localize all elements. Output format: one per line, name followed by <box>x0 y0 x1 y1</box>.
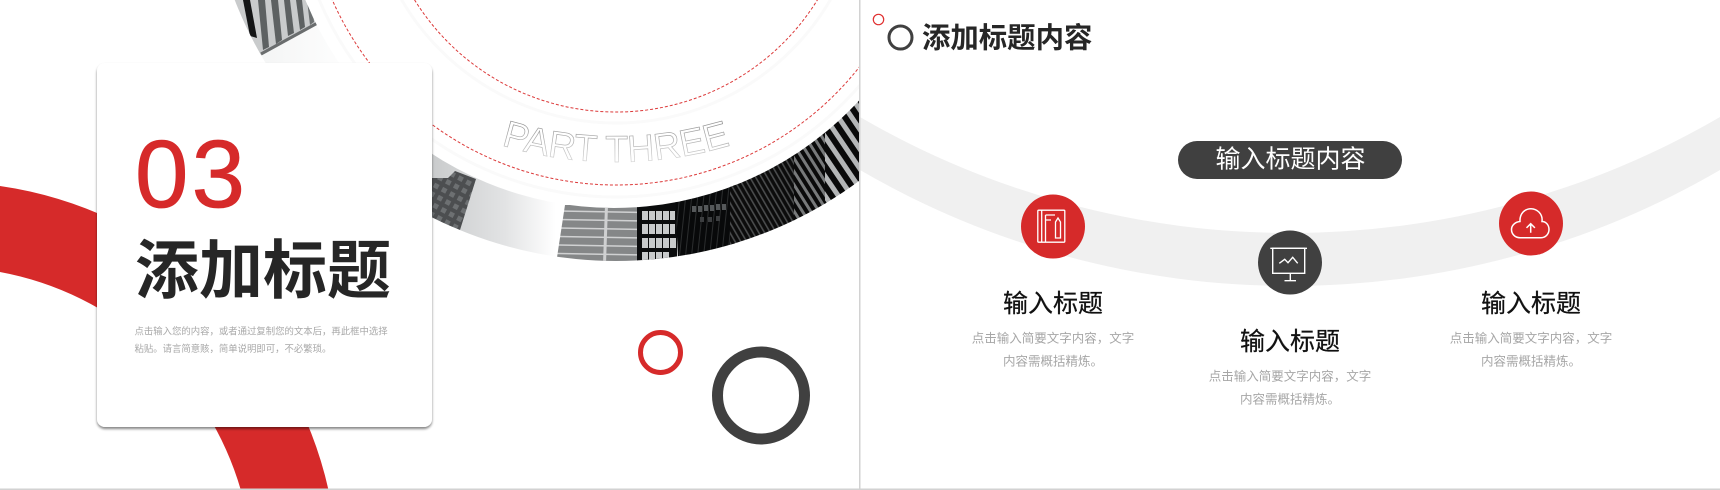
building at top <box>234 0 317 56</box>
panel: right content slide <box>860 14 1720 407</box>
sky at lower left <box>432 154 542 254</box>
icon: presentation screen <box>1258 230 1322 294</box>
photo ring: city buildings <box>225 0 860 270</box>
section description <box>134 326 388 354</box>
black tower with lit windows <box>637 202 677 260</box>
item 3 text: 点击输入简要文字内容，文字 <box>1450 330 1612 346</box>
section number: 03 <box>135 121 245 228</box>
item 1 text <box>972 330 1134 368</box>
item 1 text: 点击输入简要文字内容，文字 <box>972 330 1134 346</box>
soft ring glow outer <box>294 0 938 197</box>
item 1 text: 内容需概括精炼。 <box>1003 354 1103 368</box>
card <box>97 63 432 427</box>
dark glass tower <box>676 185 735 256</box>
dashed circle inner <box>414 0 818 112</box>
section description: 粘贴。请言简意赅，简单说明即可，不必繁琐。 <box>134 343 331 354</box>
grey curved band <box>860 117 1720 286</box>
grey building at lower left <box>428 171 476 230</box>
striped tower, mid lines <box>794 132 826 220</box>
pill heading: 输入标题内容 <box>1215 146 1366 174</box>
item 2 text <box>1209 368 1371 406</box>
pill heading <box>1178 141 1402 179</box>
small red ring <box>873 14 884 25</box>
item 3 text: 内容需概括精炼。 <box>1481 354 1581 368</box>
panel: left cover slide <box>0 0 859 488</box>
section title: 添加标题 <box>135 235 391 307</box>
section description: 点击输入您的内容，或者通过复制您的文本后，再此框中选择 <box>134 326 388 336</box>
item 2 text: 内容需概括精炼。 <box>1240 392 1340 406</box>
slide title: 添加标题内容 <box>922 22 1092 54</box>
grey office building <box>556 205 638 264</box>
striped tower, fine lines <box>730 154 795 245</box>
icon: cloud upload <box>1499 192 1563 256</box>
item 1 heading: 输入标题 <box>1003 290 1103 318</box>
item 2 <box>1209 230 1371 406</box>
item 3 text <box>1450 330 1612 368</box>
striped tower, bright side <box>825 100 859 204</box>
red ring <box>640 332 680 372</box>
item 3 heading: 输入标题 <box>1481 290 1581 318</box>
red ribbon arc <box>0 186 328 490</box>
curved outline text: PART THREE: PART THREE <box>504 120 730 162</box>
soft ring glow inner <box>368 0 864 123</box>
item 2 text: 点击输入简要文字内容，文字 <box>1209 368 1371 384</box>
item 1 <box>972 194 1134 368</box>
sky at top <box>262 42 286 63</box>
item 2 heading: 输入标题 <box>1240 328 1340 356</box>
dark title ring <box>889 26 912 49</box>
icon: notebook and pencil <box>1021 194 1085 258</box>
item 3 <box>1450 192 1612 368</box>
dark ring <box>718 352 804 439</box>
dashed circle outer <box>332 0 859 186</box>
